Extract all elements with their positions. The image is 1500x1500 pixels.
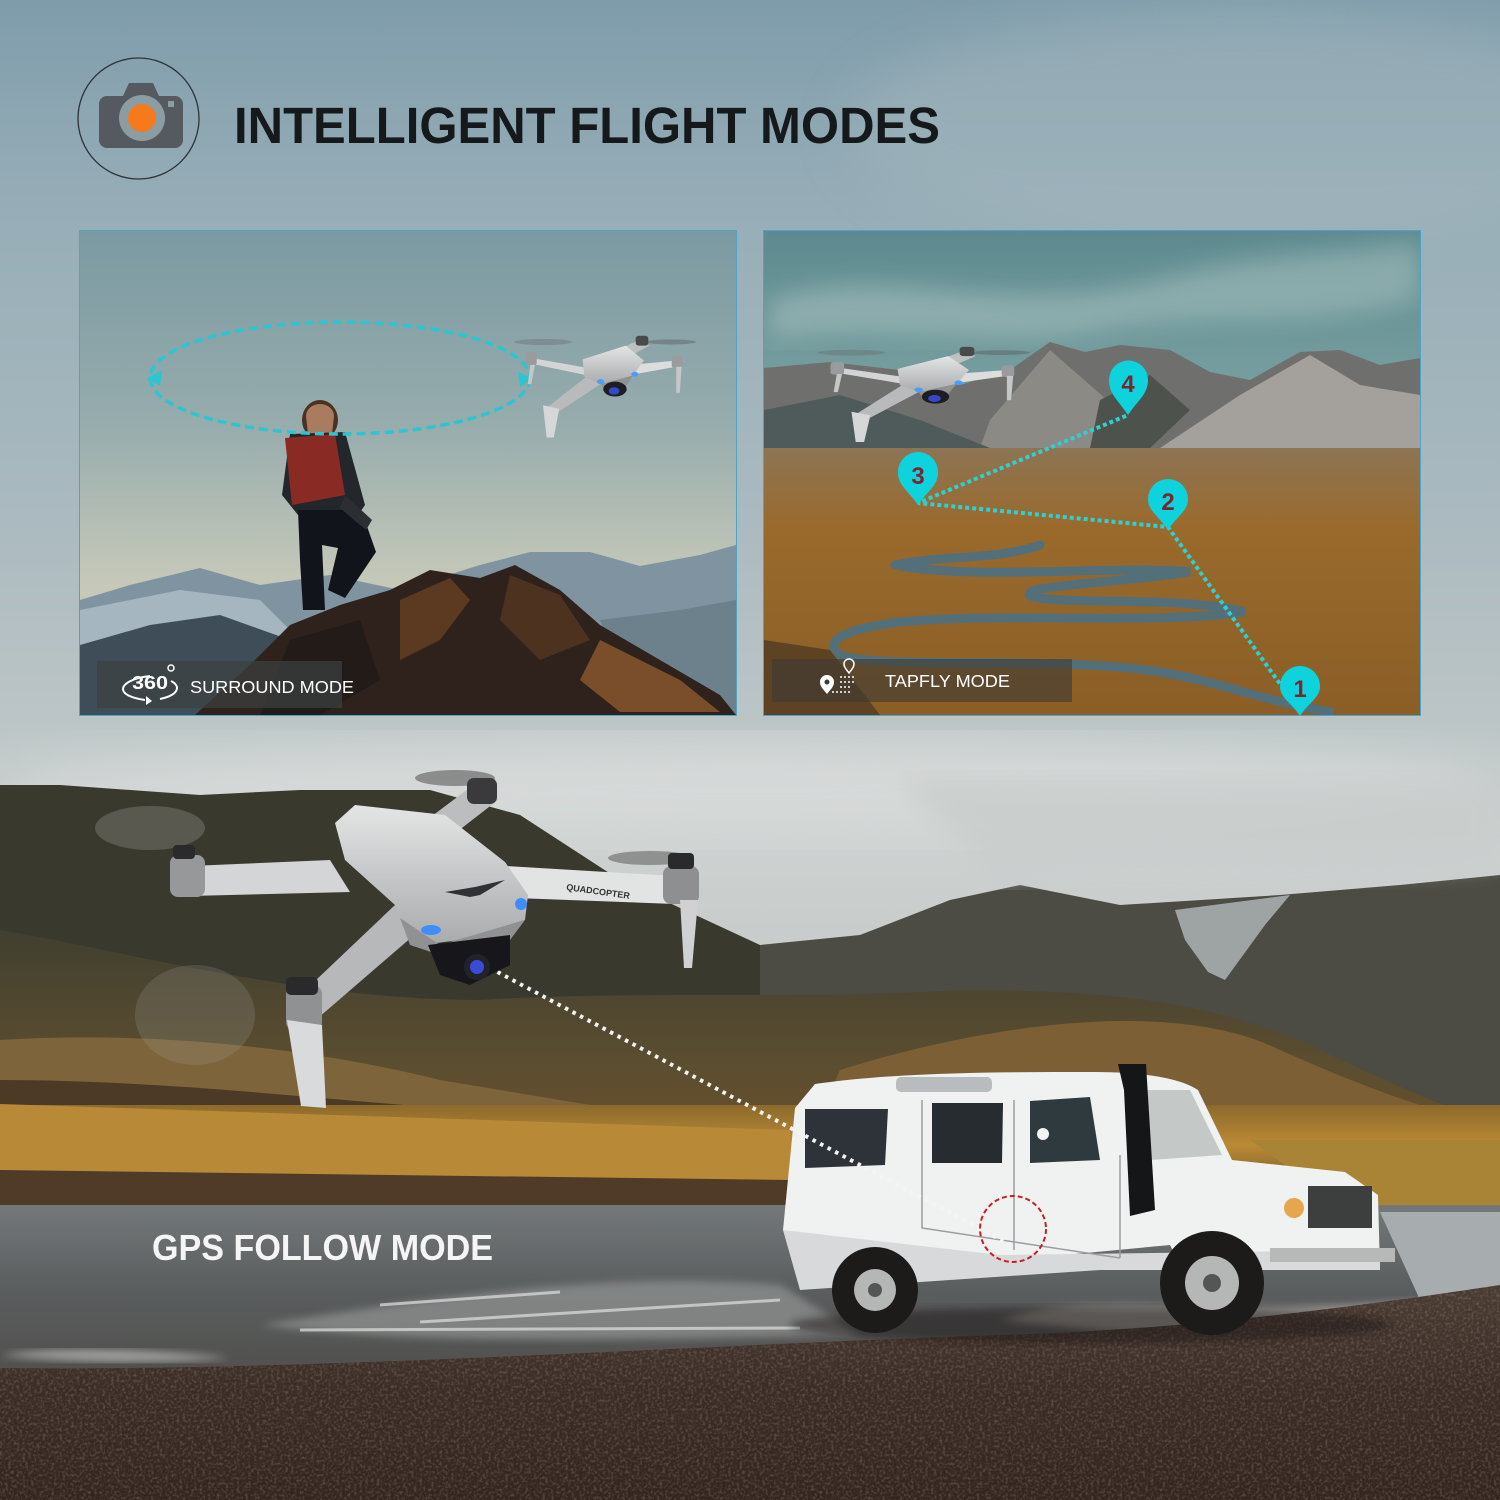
waypoint 1 <box>1280 666 1320 716</box>
waypoint 3 <box>898 452 938 505</box>
flight path: tapfly waypoints <box>918 415 1300 712</box>
waypoint 2: 2 <box>1161 489 1175 516</box>
scene: gps follow landscape <box>0 740 1500 1500</box>
label: surround mode: 360 <box>132 673 168 693</box>
tracking beam: dotted line to vehicle <box>490 968 1014 1247</box>
gravel foreground <box>0 1285 1500 1500</box>
panel: tapfly mode <box>764 230 1420 716</box>
icon: camera badge <box>78 58 199 179</box>
target marker <box>980 1196 1046 1262</box>
flight path: surround circle <box>147 322 532 434</box>
left mountain range <box>0 785 900 1140</box>
drone: large <box>95 770 699 1108</box>
drone: large: QUADCOPTER <box>566 882 631 901</box>
waypoint 1: 1 <box>1293 676 1307 703</box>
title: INTELLIGENT FLIGHT MODES <box>234 97 940 154</box>
waypoint 2 <box>1148 479 1188 530</box>
vehicle: white 4x4 <box>783 1064 1395 1343</box>
waypoint 3: 3 <box>911 463 925 490</box>
label: tapfly mode: TAPFLY MODE <box>885 671 1010 691</box>
panel: surround mode <box>80 230 736 716</box>
drone: surround <box>514 336 696 437</box>
splashes <box>260 1281 860 1339</box>
right mountain range <box>760 875 1500 1150</box>
label: surround mode <box>97 661 354 708</box>
person with backpack <box>282 400 376 610</box>
water <box>0 1205 1500 1380</box>
golden plain <box>0 1105 1500 1205</box>
waypoint 4: 4 <box>1121 371 1135 398</box>
waypoint 4 <box>1109 360 1148 415</box>
caption: gps follow mode: GPS FOLLOW MODE <box>152 1227 493 1268</box>
drone: tapfly <box>818 347 1030 442</box>
label: surround mode: SURROUND MODE <box>190 677 354 697</box>
label: tapfly mode <box>772 659 1072 702</box>
mid hills <box>0 930 1500 1160</box>
